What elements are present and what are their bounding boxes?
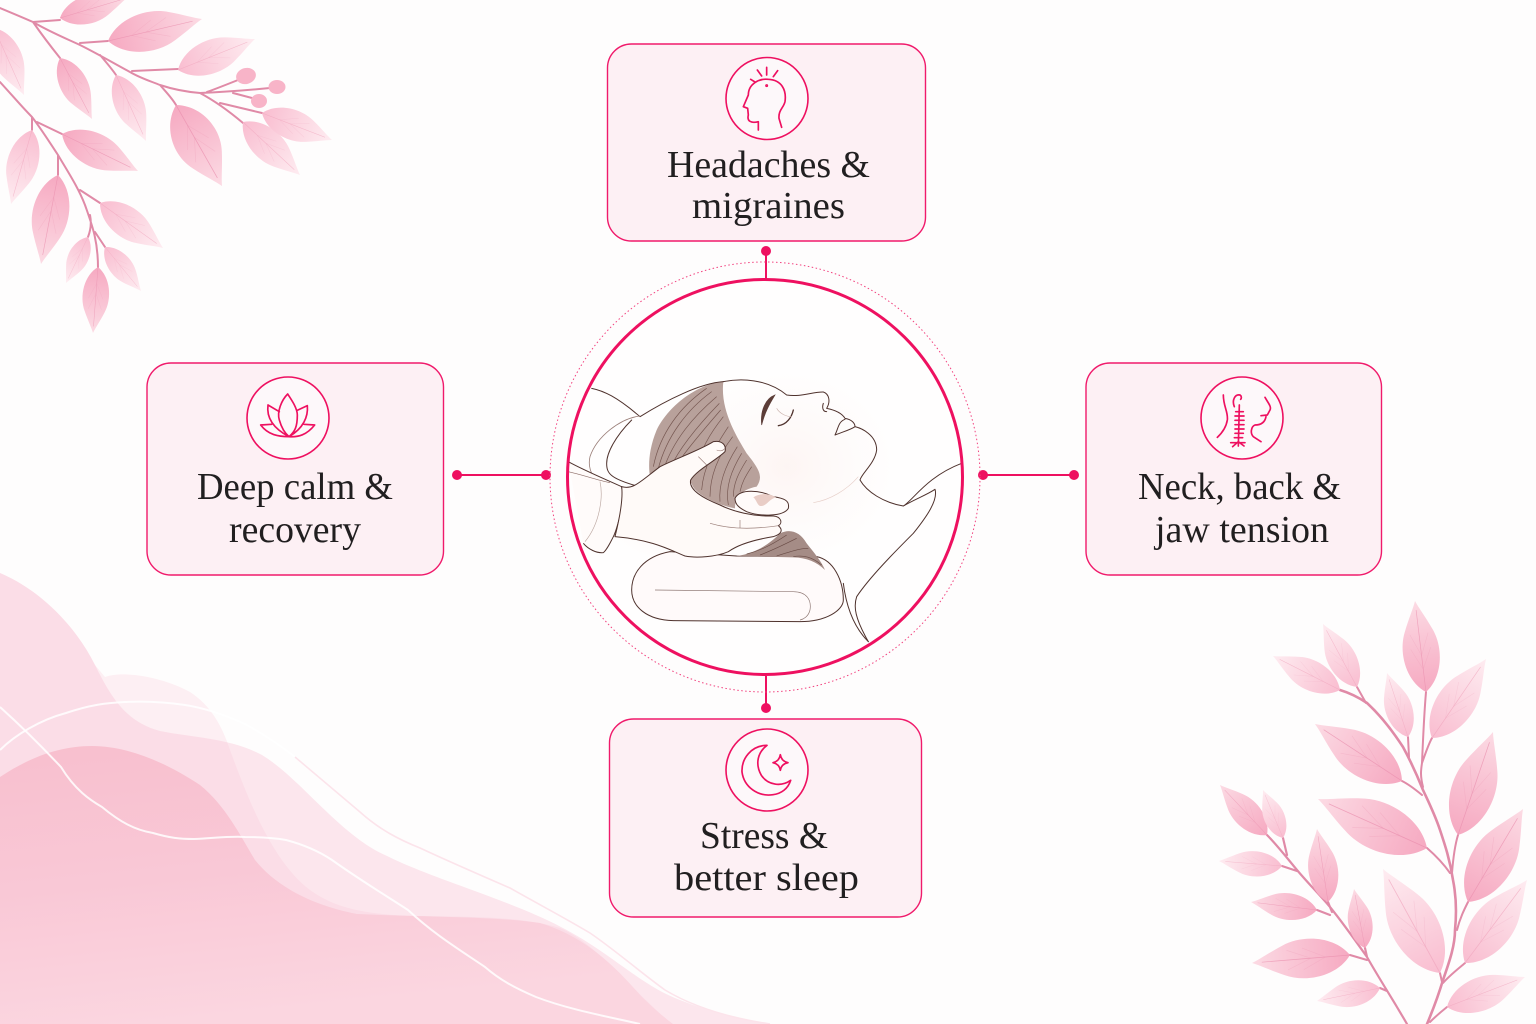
buds (234, 66, 286, 108)
icon: head with radiating pain (726, 58, 808, 140)
heading: recovery (229, 509, 361, 551)
heading: migraines (692, 185, 845, 227)
icon: spine and face profile (1201, 377, 1283, 459)
panel: neck, back and jaw tension (1086, 363, 1382, 575)
leaves (0, 0, 337, 334)
heading: Neck, back & (1138, 466, 1341, 508)
heading: Stress & (700, 815, 828, 857)
leaves (1210, 599, 1536, 1023)
heading (667, 144, 870, 227)
heading (674, 815, 859, 899)
panel: deep calm and recovery (147, 363, 444, 575)
heading: jaw tension (1153, 509, 1329, 551)
heading: Deep calm & (197, 466, 393, 508)
heading: better sleep (674, 857, 859, 899)
heading (197, 466, 393, 551)
icon: crescent moon and star (726, 729, 808, 811)
panel: headaches and migraines (608, 44, 926, 241)
heading (1138, 466, 1341, 551)
top-left leafy branch (0, 0, 337, 334)
panel: stress and better sleep (610, 719, 922, 917)
bottom-right leafy branch (1210, 599, 1536, 1024)
watercolor wave background (0, 573, 770, 1024)
icon: lotus (247, 377, 329, 459)
heading: Headaches & (667, 144, 870, 186)
connectors (452, 246, 1079, 713)
lower hair (737, 531, 825, 570)
central illustration: head massage in ring (550, 262, 980, 692)
drawing of woman receiving massage (568, 367, 962, 642)
